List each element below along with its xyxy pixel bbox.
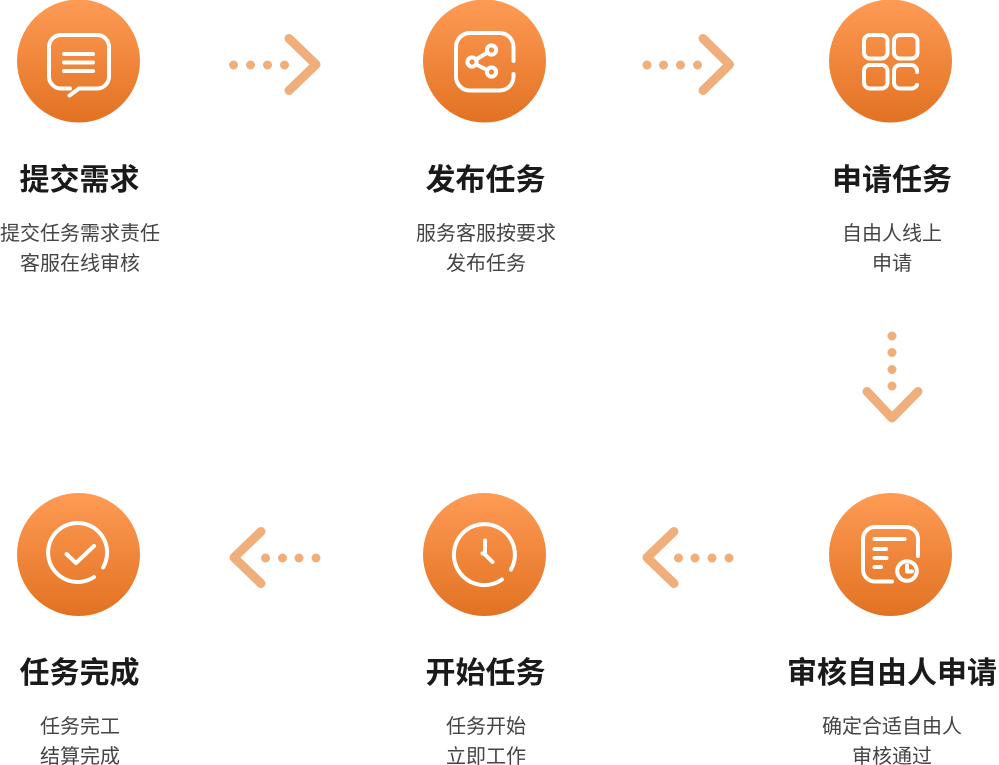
description: submit request: 提交任务需求责任 <box>0 222 160 245</box>
description: task complete: 任务完工 <box>40 715 120 738</box>
icon: grid <box>829 0 952 122</box>
description: start task: 任务开始 <box>446 715 526 738</box>
description: review freelancer: 确定合适自由人 <box>822 715 962 738</box>
icon: clock <box>423 493 546 616</box>
step 6: task complete <box>17 493 140 765</box>
heading: start task: 开始任务 <box>426 657 546 690</box>
icon: speech bubble <box>17 0 140 122</box>
arrow: step 5 to step 6 <box>234 532 320 584</box>
step 4: review freelancer <box>787 493 997 765</box>
arrow: step 2 to step 3 <box>642 38 730 90</box>
description: publish task: 服务客服按要求 <box>416 222 556 245</box>
arrow: step 4 to step 5 <box>647 532 734 584</box>
arrow: step 1 to step 2 <box>229 38 316 90</box>
icon: document with clock <box>829 493 952 616</box>
description: start task <box>446 715 526 765</box>
heading: task complete: 任务完成 <box>20 657 140 690</box>
icon: share <box>423 0 546 122</box>
description: apply for task <box>842 222 942 275</box>
heading: apply for task: 申请任务 <box>832 164 952 197</box>
description: submit request <box>0 222 160 275</box>
description: apply for task: 自由人线上 <box>842 222 942 245</box>
description: apply for task: 申请 <box>872 252 912 275</box>
description: submit request: 客服在线审核 <box>20 252 140 275</box>
heading: submit request: 提交需求 <box>20 164 140 197</box>
arrow: step 3 to step 4 <box>867 332 918 418</box>
step 2: publish task <box>416 0 556 275</box>
step 1: submit request <box>0 0 160 275</box>
heading: review freelancer: 审核自由人申请 <box>787 657 997 690</box>
step 3: apply for task <box>829 0 952 275</box>
heading: publish task: 发布任务 <box>426 164 546 197</box>
description: review freelancer <box>822 715 962 765</box>
step 5: start task <box>423 493 546 765</box>
description: publish task: 发布任务 <box>446 252 526 275</box>
icon: check <box>17 493 140 616</box>
description: task complete <box>40 715 120 765</box>
description: publish task <box>416 222 556 275</box>
